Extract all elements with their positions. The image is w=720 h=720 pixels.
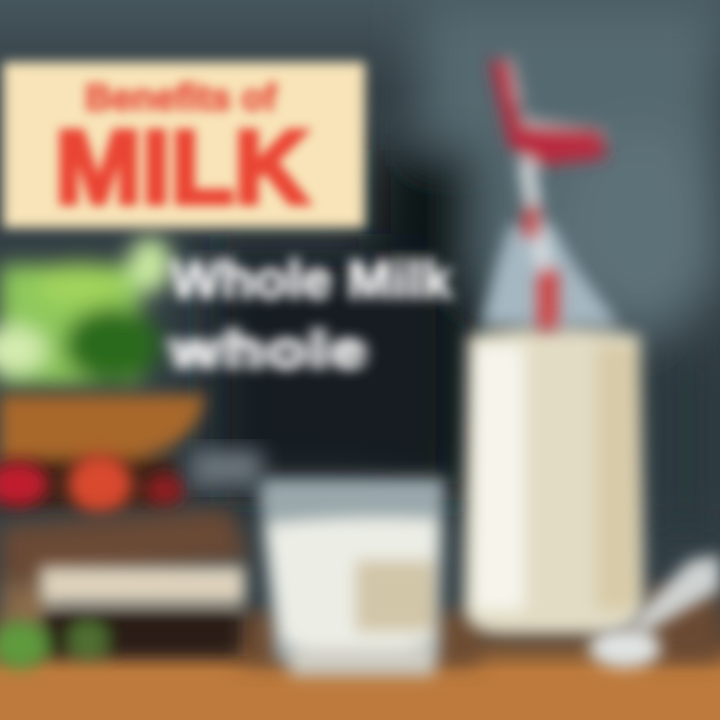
food on the left: bread slice xyxy=(0,566,245,669)
food on the left: salad xyxy=(0,237,172,385)
milk bottle xyxy=(464,225,644,634)
title large word: MILK xyxy=(55,110,309,226)
subtitle line one: Whole Milk xyxy=(170,250,452,310)
food on the left: bowl xyxy=(0,395,205,508)
food on the left: bread board xyxy=(0,508,250,635)
small grey blurred mark xyxy=(192,450,262,486)
title small line: Benefits of xyxy=(85,77,276,118)
wall background xyxy=(210,0,720,540)
subtitle line two: whole xyxy=(170,320,369,380)
food on the left: tomatoes xyxy=(0,454,185,514)
spoon xyxy=(589,555,720,668)
milk glass xyxy=(258,478,445,676)
wooden table shadow xyxy=(240,590,720,665)
red striped straw xyxy=(490,58,606,330)
title banner xyxy=(3,62,365,228)
